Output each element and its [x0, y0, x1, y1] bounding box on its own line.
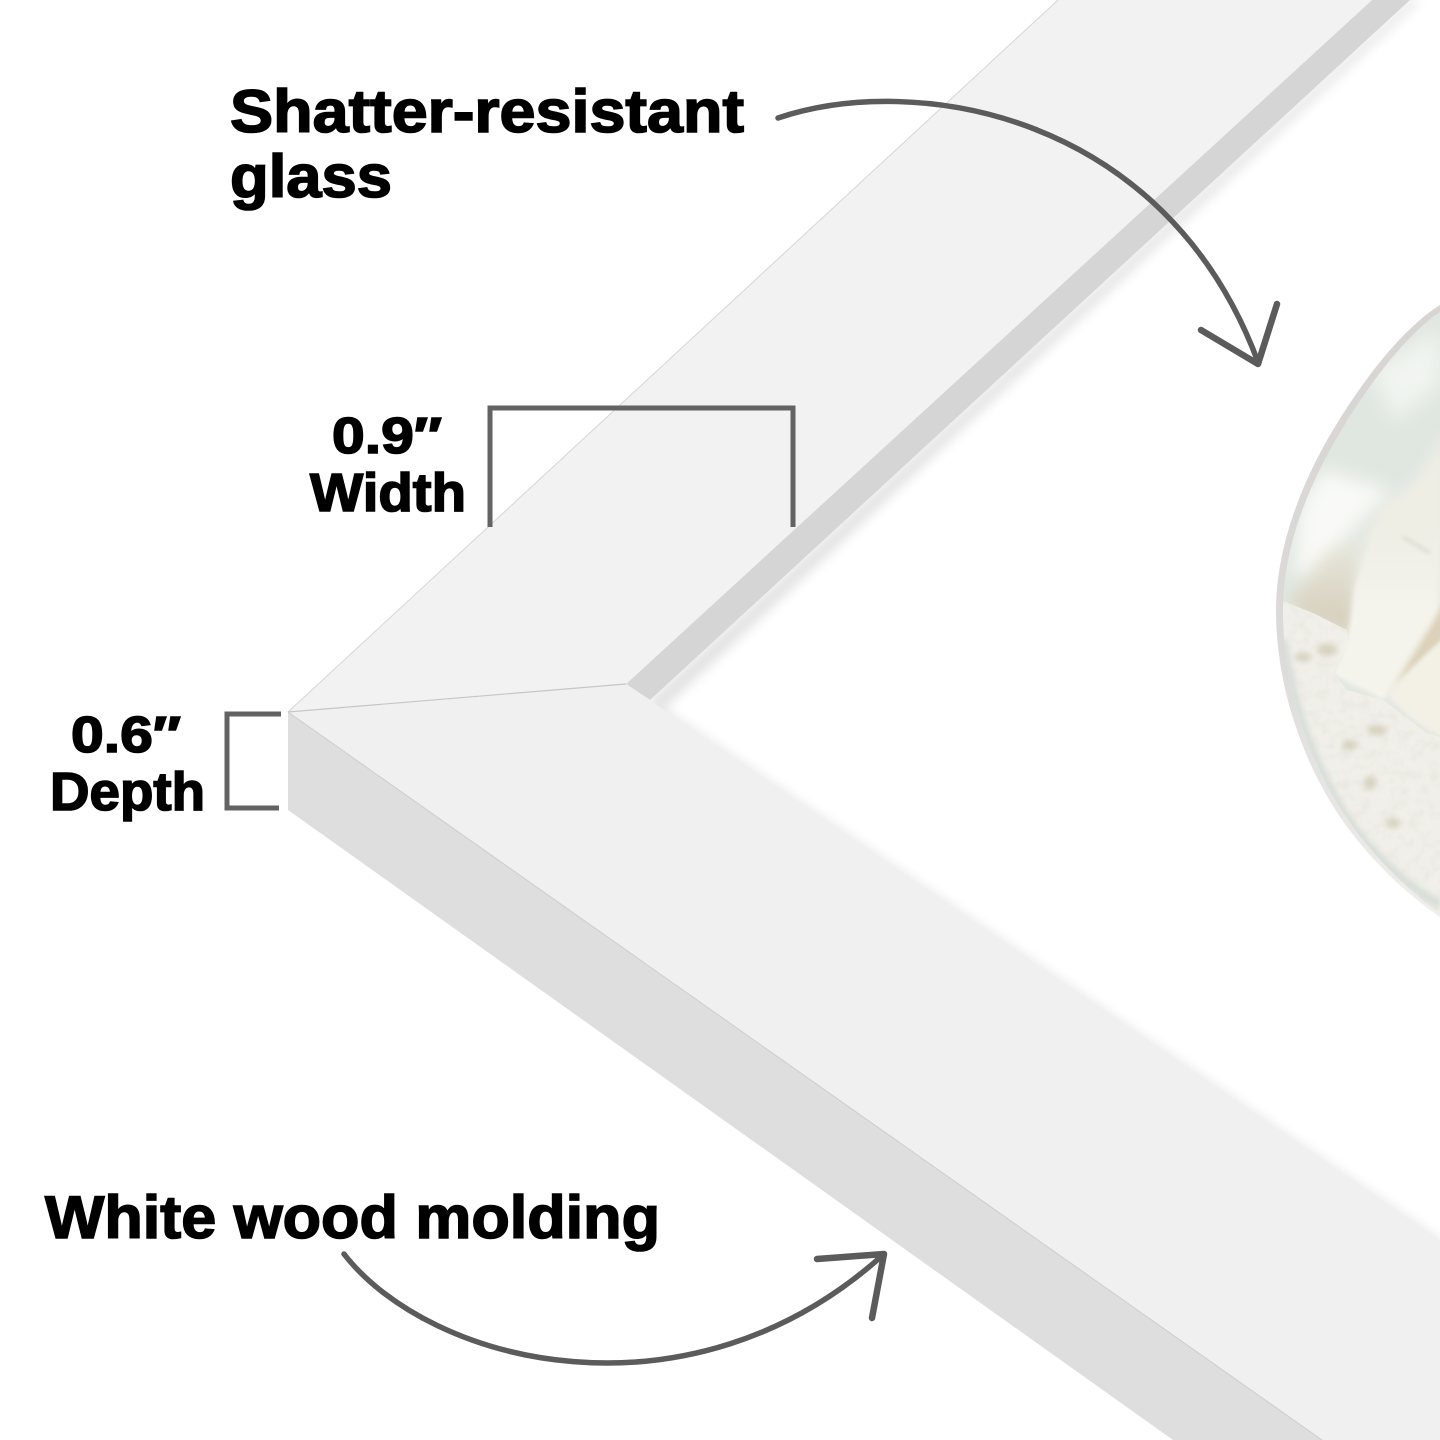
frame top face: upper arm: [288, 0, 1372, 712]
heading: Shatter-resistant glass: Shatter-resistant: [230, 78, 744, 145]
callout: white wood molding: [45, 1184, 884, 1363]
oval photo window with puppy: [1270, 300, 1440, 925]
bracket: width: [490, 408, 793, 527]
frame molding: [288, 0, 1440, 1440]
fur crease: [1403, 537, 1430, 553]
dog body: [1348, 450, 1440, 694]
callout: depth dimension: [50, 706, 281, 822]
soft tan haunch: [1288, 542, 1356, 634]
frame edge lines: [288, 0, 1322, 1440]
label: 0.9 inch width: Width: [310, 463, 466, 523]
arrow: to molding: [344, 1254, 884, 1363]
carpet: [1283, 602, 1440, 914]
shadow between legs: [1398, 606, 1440, 680]
bevel: inner lip of frame: [626, 0, 1410, 700]
label: 0.9 inch width: [310, 407, 466, 523]
inner shadow on mat: [650, 0, 1440, 1250]
heading: White wood molding: White wood molding: [45, 1184, 660, 1251]
heading: Shatter-resistant glass: [230, 78, 744, 210]
frame top face: lower arm: [288, 684, 1440, 1440]
arrow: to glass: [778, 101, 1277, 364]
heading: Shatter-resistant glass: glass: [230, 143, 392, 210]
puppy front leg: [1334, 581, 1385, 698]
puppy second leg: [1394, 640, 1440, 736]
frame outer side face: [288, 712, 1322, 1440]
carpet blotches: [1294, 644, 1400, 828]
label: 0.9 inch width: 0.9″: [332, 407, 442, 464]
callout: width dimension: [310, 407, 793, 527]
bracket: depth: [227, 714, 281, 808]
label: 0.6 inch depth: Depth: [50, 762, 205, 822]
label: 0.6 inch depth: 0.6″: [71, 706, 181, 763]
carpet cool edge tint: [1283, 640, 1440, 905]
oval photo rim: [1276, 305, 1440, 917]
photo content: [1283, 312, 1440, 912]
callout: shatter-resistant glass: [230, 78, 1277, 364]
label: 0.6 inch depth: [50, 706, 205, 822]
